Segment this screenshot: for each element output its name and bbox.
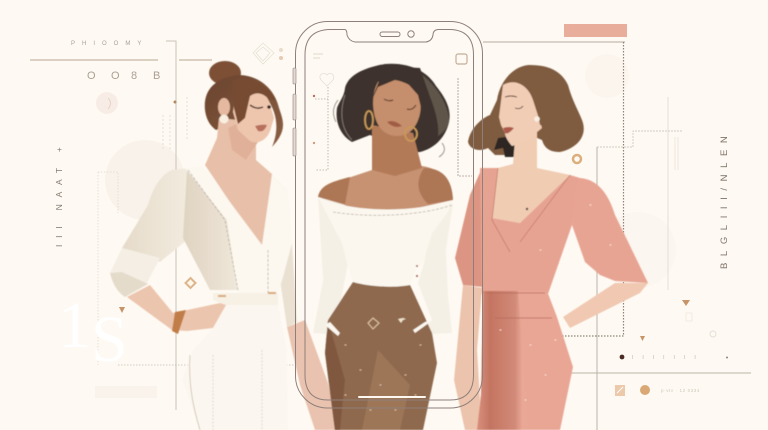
neck and chest bbox=[492, 130, 570, 223]
text: large white numeral: 1 bbox=[58, 289, 91, 362]
trouser sparkles bbox=[345, 345, 421, 410]
skirt bbox=[477, 291, 573, 430]
text: icon row glyphs: OO8B bbox=[87, 70, 160, 82]
pendant bbox=[526, 208, 528, 210]
hair side bbox=[508, 70, 549, 125]
pocket hands bbox=[325, 320, 433, 336]
fringe bbox=[370, 66, 431, 120]
neck and chest skin bbox=[205, 118, 272, 250]
sleeve right bbox=[572, 178, 648, 283]
hair back bbox=[205, 75, 283, 147]
ear bbox=[218, 98, 230, 116]
face bbox=[373, 80, 421, 136]
text: footer caption: p·vtv · 12 0334 bbox=[661, 388, 700, 393]
icon: small gold marker bbox=[640, 336, 645, 341]
bun bbox=[209, 61, 241, 85]
trouser icons bbox=[368, 318, 379, 329]
panel: left decorative interface lines bbox=[30, 41, 296, 410]
panel: right decorative interface lines bbox=[483, 42, 751, 430]
phone home bar bbox=[358, 396, 426, 398]
icon: small gold heart bbox=[682, 300, 690, 306]
dress sparkles bbox=[500, 205, 611, 400]
eye bbox=[250, 105, 263, 108]
eyes and mouth bbox=[384, 99, 416, 110]
bracelet bbox=[172, 310, 186, 334]
belt lines bbox=[486, 293, 552, 318]
skirt bbox=[182, 305, 288, 430]
sleeve cuff bbox=[110, 248, 160, 297]
top bbox=[318, 197, 453, 287]
fringe bbox=[233, 79, 276, 124]
legend: dotted progress row bbox=[620, 355, 728, 361]
hair back bbox=[337, 64, 450, 152]
text: large white numeral: S bbox=[91, 303, 128, 376]
seam lines bbox=[188, 170, 268, 345]
belt bbox=[213, 293, 278, 305]
icon: small gold triangle, left figure bbox=[119, 307, 125, 313]
arm right lower skin bbox=[287, 320, 340, 430]
right sleeve bbox=[272, 175, 297, 327]
pink header bar bbox=[564, 24, 627, 37]
side buttons bbox=[293, 68, 296, 84]
earrings bbox=[365, 111, 373, 129]
icon: small gold diamond, left figure bbox=[186, 278, 196, 288]
hair bbox=[468, 65, 584, 155]
text: vertical right label: BLGLIII/NLEN bbox=[719, 130, 730, 269]
dress top bbox=[480, 168, 580, 294]
lips bbox=[255, 125, 267, 131]
sleeves bbox=[313, 197, 348, 335]
icon: gold round badge bbox=[640, 385, 650, 395]
figure: woman in pink dress, right bbox=[454, 65, 648, 430]
forearm and hand bbox=[127, 285, 237, 331]
trousers bbox=[325, 282, 437, 430]
text: vertical left label: III NAAT + bbox=[54, 140, 64, 247]
left arm bbox=[454, 285, 482, 430]
face bbox=[233, 87, 274, 142]
face bbox=[499, 82, 542, 146]
phone screen UI details bbox=[313, 54, 472, 176]
figure: woman in white, left bbox=[110, 61, 340, 430]
bodice shade bbox=[183, 170, 238, 290]
notch camera bbox=[408, 31, 414, 37]
phone outline bbox=[293, 22, 482, 408]
bodice front bbox=[185, 166, 292, 293]
icon: gold ring near shoulder bbox=[573, 155, 581, 163]
legend: dotted progress row: IIIIIII bbox=[632, 355, 705, 361]
sleeve left bbox=[122, 168, 192, 262]
sleeve left bbox=[455, 168, 483, 287]
forearm bbox=[563, 283, 648, 328]
earring bbox=[534, 116, 540, 122]
text: small top label: PHIOOMY bbox=[71, 41, 148, 47]
neck bbox=[372, 125, 422, 176]
icon: gold square badge bbox=[615, 385, 625, 396]
chest and shoulders bbox=[318, 150, 453, 212]
notch speaker bbox=[380, 32, 400, 36]
figure: woman in brown trousers, centre bbox=[313, 64, 453, 430]
earring bbox=[220, 114, 228, 124]
